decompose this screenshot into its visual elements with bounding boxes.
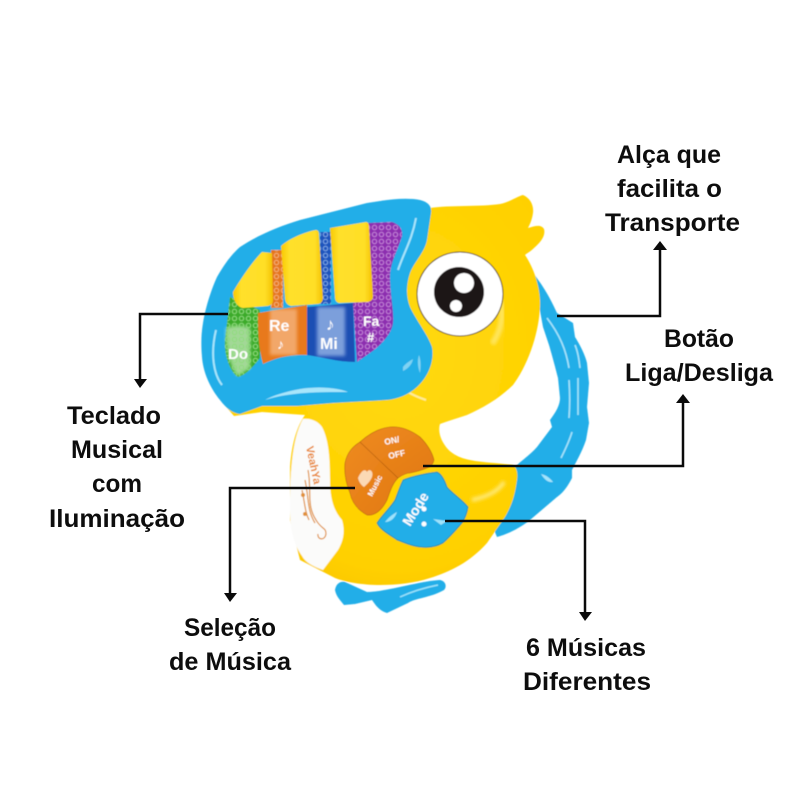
- callout: keyboard: [49, 314, 228, 533]
- orange music button: Music: [366, 473, 385, 498]
- blue mode button: [377, 472, 468, 547]
- label: handle: Transporte: [605, 209, 740, 237]
- blue key Mi: [307, 303, 355, 362]
- yellow key 3: [330, 222, 373, 303]
- blue strip: [320, 232, 331, 304]
- orange key Re: [258, 305, 307, 364]
- blue key Mi: Mi: [320, 336, 338, 353]
- callout: handle: [557, 141, 740, 316]
- label: music selection: [169, 614, 292, 676]
- blue mode button: Mode: [399, 489, 432, 529]
- carrying handle: [490, 273, 589, 537]
- label: keyboard: Iluminação: [49, 505, 185, 533]
- callout: power button: [423, 325, 774, 466]
- orange key Re: ♪: [277, 336, 284, 352]
- label: keyboard: [49, 402, 185, 533]
- orange music button: [345, 442, 398, 515]
- orange key Re: Re: [269, 318, 290, 335]
- label: keyboard: com: [92, 470, 142, 498]
- label: music selection: Seleção: [184, 614, 276, 642]
- piano keys: [225, 222, 402, 377]
- label: six songs: Diferentes: [523, 668, 651, 696]
- label: music selection: de Música: [169, 648, 292, 676]
- label: keyboard: Teclado: [67, 402, 161, 430]
- leader arrow: keyboard: [134, 314, 228, 388]
- label: handle: [605, 141, 740, 237]
- orange on/off button: ON/: [383, 434, 401, 447]
- leader arrow: handle: [557, 241, 667, 316]
- brand text and music staff: VeahYa: [303, 445, 323, 486]
- label: keyboard: Musical: [71, 436, 163, 464]
- leader arrow: power button: [423, 394, 690, 466]
- yellow body and head: [222, 195, 544, 585]
- label: six songs: 6 Músicas: [526, 634, 646, 662]
- label: handle: facilita o: [617, 175, 722, 203]
- leader arrow: six songs: [445, 521, 592, 621]
- label: power button: Botão: [664, 325, 734, 353]
- purple key Fa: [353, 222, 402, 362]
- yellow key 2: [281, 230, 323, 306]
- purple key Fa: Fa: [363, 313, 380, 329]
- callout: music selection: [169, 488, 355, 676]
- yellow key 1: [233, 252, 273, 308]
- blue key Mi: ♪: [326, 315, 334, 334]
- feet: [335, 580, 446, 613]
- label: power button: Liga/Desliga: [625, 359, 774, 387]
- orange on/off button: [360, 427, 434, 478]
- purple key Fa: #: [367, 330, 375, 345]
- callout: six songs: [445, 521, 651, 696]
- eye: [416, 252, 504, 336]
- label: power button: [625, 325, 774, 387]
- orange on/off button: OFF: [387, 448, 406, 461]
- green key Do: [225, 297, 260, 377]
- brand text and music staff: [301, 445, 326, 539]
- blue beak: [201, 199, 433, 414]
- label: six songs: [523, 634, 651, 696]
- leader arrow: music selection: [224, 488, 355, 602]
- green key Do: Do: [228, 346, 248, 363]
- label: handle: Alça que: [617, 141, 721, 169]
- white belly panel: [290, 419, 344, 570]
- orange strip: [271, 250, 283, 308]
- toucan toy illustration: [201, 195, 589, 613]
